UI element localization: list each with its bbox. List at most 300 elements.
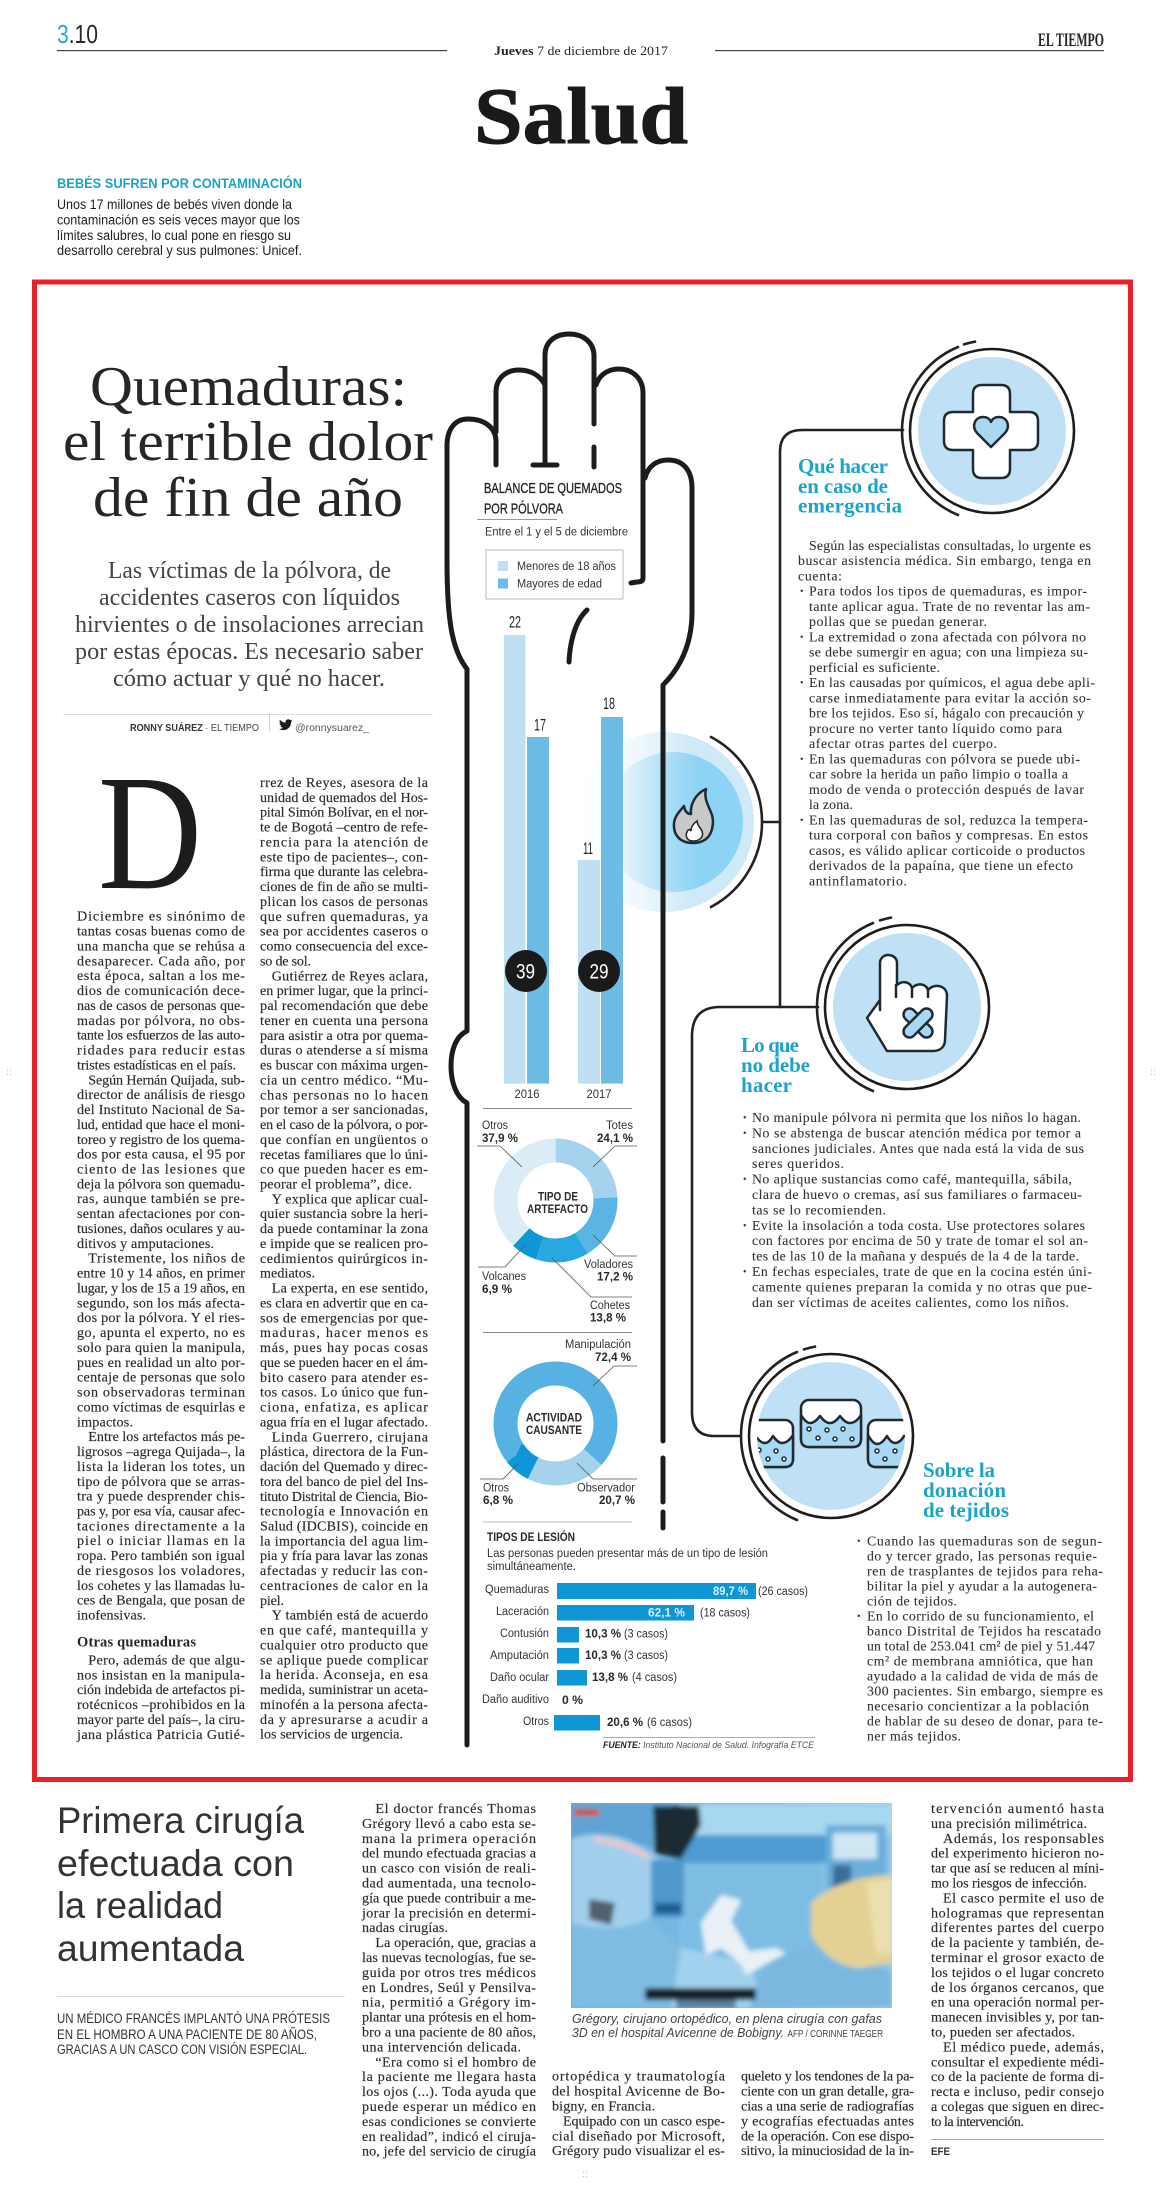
article column 2: rencia para la atención de bbox=[260, 834, 428, 850]
row: laceración: Laceración bbox=[496, 1606, 549, 1618]
chart: tipos de lesión bbox=[482, 1529, 808, 1730]
list: derivados de la papaína, que tiene un efecto bbox=[809, 858, 1073, 873]
article 2 column 1: una intervención delicada. bbox=[362, 2039, 521, 2055]
list: Cuando las quemaduras son de segun- bbox=[867, 1534, 1102, 1548]
article 2 column 1: bro a una paciente de 80 años, bbox=[362, 2024, 536, 2040]
connector lines bbox=[692, 430, 903, 1436]
list: antinflamatorio. bbox=[809, 874, 907, 888]
icon: hand with bandage bbox=[817, 918, 989, 1091]
article column 1: ropa. Pero también son igual bbox=[77, 1548, 245, 1564]
donut: actividad causante: CAUSANTE bbox=[526, 1423, 582, 1437]
chart: balance de quemados: Entre el 1 y el 5 de diciembre bbox=[485, 526, 628, 538]
article 2 column 4 bbox=[931, 1801, 1105, 2130]
secondary headline bbox=[57, 1800, 304, 1969]
secondary headline: la realidad bbox=[57, 1885, 223, 1926]
article column 2: minofén a la persona afecta- bbox=[260, 1697, 428, 1713]
donut: actividad causante: Observador bbox=[577, 1483, 635, 1495]
list bbox=[857, 1534, 1103, 1744]
chart: tipos de lesión: simultáneamente. bbox=[487, 1561, 576, 1573]
list: • bbox=[857, 1536, 861, 1548]
article column 2: rrez de Reyes, asesora de la bbox=[260, 775, 429, 791]
page number: 3.10 bbox=[57, 19, 98, 49]
headline bbox=[63, 356, 433, 529]
article 2 column 4: en una operación normal per- bbox=[931, 1995, 1104, 2011]
list: No se abstenga de buscar atención médica por temor a bbox=[752, 1125, 1081, 1140]
article column 2: chas personas no lo hacen bbox=[260, 1087, 428, 1103]
list: banco Distrital de Tejidos ha rescatado bbox=[867, 1624, 1101, 1638]
heading: donación bbox=[923, 1478, 1006, 1502]
article 2 column 1: en Londres, Seúl y Pensilva- bbox=[362, 1980, 536, 1996]
article column 2: Linda Guerrero, cirujana bbox=[272, 1429, 429, 1445]
list bbox=[798, 538, 1095, 888]
article 2 column 1: puede esperar un médico en bbox=[362, 2099, 536, 2115]
bars 2017 bbox=[578, 694, 623, 1084]
heading bbox=[923, 1458, 1009, 1522]
list: camente quienes preparan la comida y no otras que pue- bbox=[752, 1279, 1092, 1294]
chart title: BALANCE DE QUEMADOS bbox=[484, 480, 622, 497]
icon: twitter bird bbox=[279, 719, 292, 730]
row: quemaduras bbox=[485, 1583, 808, 1599]
row: daño auditivo: 0 % bbox=[562, 1693, 583, 1707]
article column 1: lud, entidad que hace el moni- bbox=[77, 1117, 245, 1133]
secondary deck: GRACIAS A UN CASCO CON VISIÓN ESPECIAL. bbox=[57, 2042, 307, 2057]
article 2 column 4: diferentes partes del cuerpo bbox=[931, 1920, 1104, 1936]
article column 1: inofensivas. bbox=[77, 1608, 146, 1624]
list: car sobre la herida un paño limpio o toalla a bbox=[809, 767, 1068, 782]
article 2 column 1: Grégory llevó a cabo esta se- bbox=[362, 1816, 536, 1832]
row: otros: (6 casos) bbox=[647, 1717, 692, 1729]
article column 1: pues en realidad un alto por- bbox=[77, 1355, 245, 1371]
list: la zona. bbox=[809, 797, 853, 812]
article 2 column 2: cial diseñado por Microsoft, bbox=[552, 2128, 725, 2144]
heading bbox=[798, 454, 902, 518]
article column 1: segundo, son los más afecta- bbox=[77, 1295, 245, 1311]
article column 1: ras, aunque también se pre- bbox=[77, 1191, 245, 1207]
article column 2: por temor a ser sancionadas, bbox=[260, 1102, 428, 1118]
article 2 column 1: los ojos (...). Toda ayuda que bbox=[362, 2084, 536, 2100]
article 2 column 4: del experimento hicieron no- bbox=[931, 1846, 1104, 1862]
row: contusión: Contusión bbox=[500, 1628, 549, 1640]
row: amputación: Amputación bbox=[490, 1650, 549, 1662]
list: La extremidad o zona afectada con pólvora no bbox=[809, 630, 1086, 644]
donut: tipo de artefacto: 24,1 % bbox=[597, 1131, 633, 1145]
donut: tipo de artefacto: 37,9 % bbox=[482, 1131, 518, 1145]
article column 1 bbox=[76, 909, 246, 1743]
article column 2: dación del Quemado y direc- bbox=[260, 1459, 428, 1475]
article column 1: ces de Bengala, que posan de bbox=[77, 1593, 245, 1609]
article 2 column 4: El casco permite el uso de bbox=[943, 1890, 1104, 1906]
list: bilitar la piel y ayudar a la autogenera- bbox=[867, 1578, 1097, 1594]
article column 2: maduras, hacer menos es bbox=[260, 1325, 428, 1341]
article column 2: Salud (IDCBIS), coincide en bbox=[260, 1518, 428, 1534]
page header bbox=[57, 19, 1104, 58]
row: laceración bbox=[496, 1605, 750, 1620]
list: • bbox=[743, 1175, 747, 1186]
list: buscar asistencia médica. Sin embargo, tenga en bbox=[798, 553, 1091, 568]
donut: tipo de artefacto: 13,8 % bbox=[590, 1311, 626, 1325]
article 2 column 4: terminar el grosor exacto de bbox=[931, 1950, 1104, 1966]
article 2 column 4: mo los riesgos de infección. bbox=[931, 1876, 1087, 1892]
list: de hablar de su deseo de donar, para te- bbox=[867, 1714, 1103, 1728]
article column 1: dos por esta causa, el 95 por bbox=[77, 1147, 245, 1163]
heading: Qué hacer bbox=[798, 454, 888, 478]
heading: hacer bbox=[741, 1073, 792, 1097]
article column 1: jana plástica Patricia Gutié- bbox=[76, 1727, 245, 1743]
heading bbox=[741, 1033, 810, 1097]
list: tante aplicar agua. Trate de no reventar las am- bbox=[809, 599, 1090, 614]
article 2 column 4: una precisión milimétrica. bbox=[931, 1816, 1087, 1832]
article 2 column 4: recta e incluso, pedir consejo bbox=[931, 2084, 1104, 2100]
article column 1: director de análisis de riesgo bbox=[77, 1087, 245, 1103]
chart: balance de quemados bbox=[477, 480, 628, 1101]
article column 2: se aplique puede complicar bbox=[260, 1652, 428, 1668]
article 2 column 1: mana la primera operación bbox=[362, 1831, 536, 1847]
heading: no debe bbox=[741, 1053, 810, 1077]
total 39: 39 bbox=[516, 960, 535, 984]
article column 2: ciona, enfatiza, es aplicar bbox=[260, 1400, 428, 1416]
article column 2: cualquier otro producto que bbox=[260, 1638, 428, 1654]
article column 2: da y apresurarse a acudir a bbox=[260, 1712, 429, 1728]
article column 1: piel o iniciar llamas en la bbox=[77, 1533, 246, 1549]
list: casos, es válido aplicar corticoide o productos bbox=[809, 843, 1085, 858]
article column 1: toreo y registro de los quema- bbox=[77, 1132, 245, 1148]
headline: Quemaduras: bbox=[90, 356, 407, 418]
subheading: Otras quemaduras bbox=[77, 1635, 196, 1651]
list: con factores por encima de 50 y trate de tomar el sol an- bbox=[752, 1233, 1088, 1248]
article 2 column 4: El médico puede, además, bbox=[943, 2039, 1104, 2055]
row: contusión: (3 casos) bbox=[624, 1628, 668, 1640]
list: Evite la insolación a toda costa. Use protectores solares bbox=[752, 1218, 1085, 1233]
red frame bbox=[34, 282, 1130, 1780]
article column 2: plican los casos de personas bbox=[260, 894, 428, 910]
article 2 column 4: to la intervención. bbox=[931, 2114, 1024, 2130]
standfirst: cómo actuar y qué no hacer. bbox=[113, 666, 385, 692]
article column 1: impactos. bbox=[77, 1414, 133, 1430]
article column 2: quier sustancia sobre la heri- bbox=[260, 1206, 428, 1222]
donut: tipo de artefacto: ARTEFACTO bbox=[527, 1202, 588, 1216]
article 2 column 4: de la paciente y también, de- bbox=[931, 1935, 1104, 1951]
list: En las quemaduras con pólvora se puede ubi- bbox=[809, 752, 1080, 766]
article column 1: lista la lideran los totes, un bbox=[77, 1459, 245, 1475]
row: contusión bbox=[500, 1626, 668, 1642]
article column 1: tantas cosas buenas como de bbox=[77, 924, 245, 940]
row: quemaduras: Quemaduras bbox=[485, 1584, 549, 1596]
heading: en caso de bbox=[798, 474, 888, 498]
heading: Sobre la bbox=[923, 1458, 996, 1482]
credit: EFE bbox=[931, 2146, 950, 2158]
article 2 column 1: no, jefe del servicio de cirugía bbox=[362, 2144, 537, 2160]
secondary headline: efectuada con bbox=[57, 1843, 294, 1884]
list: En las quemaduras de sol, reduzca la tempera- bbox=[809, 812, 1088, 828]
article column 2: da puede contaminar la zona bbox=[260, 1221, 429, 1237]
article column 1: tra y puede desprender chis- bbox=[77, 1489, 245, 1505]
row: amputación: (3 casos) bbox=[624, 1650, 668, 1662]
donut: actividad causante: Manipulación bbox=[565, 1339, 631, 1351]
brief: bebés: BEBÉS SUFREN POR CONTAMINACIÓN bbox=[57, 176, 302, 191]
article 2 column 4: to, pueden ser afectados. bbox=[931, 2024, 1075, 2040]
list: • bbox=[800, 587, 804, 598]
article 2 column 3: sitivo, la minuciosidad de la in- bbox=[741, 2143, 914, 2159]
article 2 column 4: hologramas que representan bbox=[931, 1905, 1104, 1921]
article 2 column 4: Además, los responsables bbox=[943, 1831, 1104, 1847]
article column 2: Y explica que aplicar cual- bbox=[272, 1191, 428, 1207]
article 2 column 4: manecen invisibles y, por tan- bbox=[931, 2010, 1104, 2026]
bars 2017: 11 bbox=[583, 839, 593, 858]
article column 2: recetas familiares que lo úni- bbox=[260, 1147, 428, 1163]
article column 1: rotécnicos –prohibidos en la bbox=[77, 1697, 246, 1713]
article 2 column 1: “Era como si el hombro de bbox=[375, 2054, 536, 2070]
article 2 column 4: a colegas que siguen en direc- bbox=[931, 2099, 1104, 2115]
article column 1: entre 10 y 14 años, en primer bbox=[77, 1266, 245, 1282]
article 2 column 4: los tejidos o el lugar concreto bbox=[931, 1965, 1104, 1981]
row: daño ocular: Daño ocular bbox=[490, 1672, 549, 1684]
standfirst: Las víctimas de la pólvora, de bbox=[108, 558, 391, 584]
article 2 column 1: las nuevas tecnologías, fue se- bbox=[362, 1950, 536, 1966]
brief: bebés bbox=[57, 176, 302, 258]
panel: qué hacer en caso de emergencia bbox=[798, 342, 1095, 889]
article column 2: co que pueden hacer es em- bbox=[260, 1162, 428, 1178]
chart: balance de quemados: 2016 bbox=[514, 1089, 540, 1101]
article 2 column 4: consultar el expediente médi- bbox=[931, 2054, 1104, 2070]
donut: tipo de artefacto: Cohetes bbox=[590, 1300, 630, 1312]
article column 1: sentan afectaciones por con- bbox=[77, 1206, 245, 1222]
article column 2: tora del banco de piel del Ins- bbox=[260, 1474, 428, 1490]
article column 2: afectadas y reducir las con- bbox=[260, 1563, 428, 1579]
list: 300 pacientes. Sin embargo, siempre es bbox=[867, 1684, 1103, 1698]
photo caption bbox=[572, 2012, 883, 2040]
standfirst: hirvientes o de insolaciones arrecian bbox=[75, 612, 424, 638]
list: • bbox=[800, 632, 804, 644]
donut: actividad causante: 20,7 % bbox=[599, 1493, 635, 1507]
list: ner más tejidos. bbox=[867, 1728, 961, 1744]
article column 1: Entre los artefactos más pe- bbox=[88, 1429, 245, 1445]
donut: tipo de artefacto: TIPO DE bbox=[538, 1190, 578, 1204]
list: No aplique sustancias como café, mantequilla, sábila, bbox=[752, 1172, 1072, 1187]
article column 2: centraciones de calor en la bbox=[260, 1578, 429, 1594]
photo caption: Grégory, cirujano ortopédico, en plena cirugía con gafas bbox=[572, 2012, 882, 2026]
row: amputación bbox=[490, 1648, 668, 1664]
article 2 column 4: tervención aumentó hasta bbox=[931, 1801, 1105, 1817]
list: do y tercer grado, las personas requie- bbox=[867, 1548, 1097, 1564]
article column 2: mediatos. bbox=[260, 1266, 315, 1282]
article column 2: pal recomendación que debe bbox=[260, 998, 428, 1014]
article column 1: esta época, saltan a los me- bbox=[77, 968, 245, 984]
article column 1: Pero, además de que algu- bbox=[88, 1652, 245, 1668]
article column 2: Y también está de acuerdo bbox=[272, 1608, 428, 1624]
photo caption: AFP / CORINNE TAEGER bbox=[788, 2029, 883, 2040]
standfirst bbox=[75, 558, 424, 692]
glow behind arm bbox=[574, 732, 754, 912]
article 2 column 1: en realidad”, indicó el ciruja- bbox=[362, 2129, 536, 2145]
article column 2: agua fría en el lugar afectado. bbox=[260, 1414, 428, 1430]
list: • bbox=[800, 754, 804, 766]
heading: de tejidos bbox=[923, 1498, 1009, 1522]
headline: de fin de año bbox=[93, 467, 403, 529]
list: En fechas especiales, trate de que en la cocina estén úni- bbox=[752, 1264, 1092, 1279]
list: En las causadas por químicos, el agua debe apli- bbox=[809, 675, 1095, 690]
row: otros: Otros bbox=[523, 1716, 549, 1728]
article 2 column 1: un casco con visión de reali- bbox=[362, 1861, 536, 1877]
hand and arm outline bbox=[447, 334, 692, 1745]
row: laceración: (18 casos) bbox=[700, 1608, 750, 1620]
article column 2 bbox=[260, 775, 429, 1743]
row: daño ocular bbox=[490, 1670, 677, 1686]
article 2 column 1: nadas cirugías. bbox=[362, 1920, 448, 1936]
article column 2: tituto Distrital de Ciencia, Bio- bbox=[260, 1489, 428, 1505]
donut: tipo de artefacto: Totes bbox=[606, 1120, 633, 1132]
article column 2: sea por accidentes caseros o bbox=[260, 924, 428, 940]
article column 1: solo para quien la manipula, bbox=[77, 1340, 245, 1356]
article column 1: nos insistan en la manipula- bbox=[77, 1667, 245, 1683]
article 2 column 3 bbox=[741, 2069, 914, 2159]
list: Para todos los tipos de quemaduras, es impor- bbox=[809, 584, 1087, 599]
article column 1: son observadoras terminan bbox=[77, 1384, 245, 1400]
list: dan ser víctimas de aceites calientes, como los niños. bbox=[752, 1295, 1069, 1310]
list: perficial es suficiente. bbox=[809, 660, 940, 675]
article 2 column 3: ciente con un gran detalle, gra- bbox=[741, 2084, 914, 2100]
donut: tipo de artefacto: 17,2 % bbox=[597, 1270, 633, 1284]
article column 2: la importancia del agua lim- bbox=[260, 1533, 428, 1549]
secondary deck bbox=[57, 2011, 330, 2057]
panel: sobre la donación de tejidos bbox=[740, 1347, 1103, 1744]
article 2 column 1 bbox=[361, 1801, 537, 2160]
article column 2: en el caso de la pólvora, o por- bbox=[260, 1117, 428, 1133]
article column 2: como consecuencia del exce- bbox=[260, 939, 428, 955]
article column 2: cedimientos quirúrgicos in- bbox=[260, 1251, 428, 1267]
article 2 column 4: co de la paciente de forma di- bbox=[931, 2069, 1104, 2085]
article column 2: plástica, directora de la Fun- bbox=[260, 1444, 428, 1460]
list: cuenta: bbox=[798, 568, 842, 584]
brief: bebés: contaminación es seis veces mayor que los bbox=[57, 212, 300, 228]
newspaper name: EL TIEMPO bbox=[1038, 31, 1104, 51]
heading: Lo que bbox=[741, 1033, 799, 1057]
row: otros: 20,6 % bbox=[607, 1715, 643, 1729]
article column 1: centaje de personas que solo bbox=[77, 1370, 245, 1386]
donut: tipo de artefacto bbox=[477, 1120, 637, 1325]
article column 2: La experta, en ese sentido, bbox=[272, 1281, 428, 1297]
article column 1: mayor parte del país–, la ciru- bbox=[77, 1712, 245, 1728]
date: Jueves 7 de diciembre de 2017 bbox=[494, 43, 669, 58]
donut: actividad causante: 6,8 % bbox=[483, 1493, 513, 1507]
list: cm² de membrana amniótica, que han bbox=[867, 1654, 1093, 1668]
list: sanciones judiciales. Antes que nada está la vida de sus bbox=[752, 1141, 1084, 1156]
legend: Mayores de edad bbox=[517, 579, 602, 591]
article column 1: madas por pólvora, no obs- bbox=[77, 1013, 245, 1029]
list bbox=[743, 1110, 1092, 1310]
donut: tipo de artefacto: Volcanes bbox=[482, 1271, 526, 1283]
article column 2: tecnología e Innovación en bbox=[260, 1504, 428, 1520]
list: pollas que se puedan generar. bbox=[809, 614, 987, 629]
list: un total de 253.041 cm² de piel y 51.447 bbox=[867, 1638, 1095, 1654]
article column 1: una mancha que se rehúsa a bbox=[77, 938, 246, 954]
article column 1: desaparecer. Cada año, por bbox=[77, 953, 245, 969]
article column 2: la herida. Aconseja, en esa bbox=[260, 1667, 429, 1683]
brief: bebés: límites salubres, lo cual pone en riesgo su bbox=[57, 228, 291, 243]
article 2 column 3: cias a una serie de radiografías bbox=[741, 2098, 914, 2114]
article column 1: Según Hernán Quijada, sub- bbox=[88, 1072, 245, 1088]
list: ren de trasplantes de tejidos para reha- bbox=[867, 1564, 1103, 1578]
list: ayudado a la calidad de vida de más de bbox=[867, 1668, 1098, 1684]
article column 2: piel. bbox=[260, 1593, 284, 1609]
article column 2: sos de emergencias por que- bbox=[260, 1310, 428, 1326]
article column 2: firma que durante las celebra- bbox=[260, 864, 428, 880]
article column 1: ditivos y amputaciones. bbox=[77, 1236, 214, 1252]
article column 1: dos por la pólvora. Y el ries- bbox=[77, 1310, 245, 1326]
article column 2: en primer lugar, que la princi- bbox=[260, 983, 428, 999]
secondary headline: Primera cirugía bbox=[57, 1800, 304, 1841]
article column 1: tante los esfuerzos de las auto- bbox=[77, 1028, 245, 1044]
article column 1: ridades para reducir estas bbox=[77, 1042, 245, 1058]
list: • bbox=[800, 816, 804, 826]
chart: balance de quemados: 2017 bbox=[586, 1089, 612, 1101]
list: Según las especialistas consultadas, lo urgente es bbox=[809, 538, 1091, 553]
chart: balance de quemados: POR PÓLVORA bbox=[484, 500, 563, 518]
article column 2: ciones de fin de año se multi- bbox=[260, 879, 428, 895]
byline: @ronnysuarez_ bbox=[295, 722, 369, 734]
list: tura corporal con baños y compresas. En estos bbox=[809, 828, 1088, 843]
donut: actividad causante: 72,4 % bbox=[595, 1350, 631, 1364]
drop cap: D bbox=[98, 741, 202, 924]
article 2 column 1: La operación, que, gracias a bbox=[375, 1935, 537, 1951]
article column 2: pia y fría para lavar las zonas bbox=[260, 1548, 428, 1564]
article column 1: de riesgosos los voladores, bbox=[77, 1563, 245, 1579]
list: bre los tejidos. Eso sí, hágalo con precaución y bbox=[809, 706, 1084, 721]
source: FUENTE: Instituto Nacional de Salud. Infografía ETCE bbox=[603, 1740, 815, 1751]
article column 2: Gutiérrez de Reyes aclara, bbox=[272, 968, 428, 984]
article column 2: bito casero para atender es- bbox=[260, 1370, 428, 1386]
article 2 column 3: de la operación. Con ese dispo- bbox=[741, 2128, 914, 2144]
article column 2: tener en cuenta una persona bbox=[260, 1013, 429, 1029]
list: No manipule pólvora ni permita que los niños lo hagan. bbox=[752, 1110, 1081, 1125]
article 2 column 1: El doctor francés Thomas bbox=[375, 1801, 536, 1817]
photo caption: 3D en el hospital Avicenne de Bobigny. bbox=[572, 2026, 784, 2040]
article column 1: Diciembre es sinónimo de bbox=[77, 909, 245, 925]
secondary deck: EN EL HOMBRO A UNA PACIENTE DE 80 AÑOS, bbox=[57, 2027, 317, 2042]
bars 2016: 17 bbox=[534, 716, 546, 734]
article column 1: dios de comunicación dece- bbox=[77, 983, 245, 999]
article 2 column 1: jorar la precisión en determi- bbox=[361, 1905, 536, 1921]
section title: Salud bbox=[474, 73, 688, 161]
article 2 column 1: la paciente me llegara hasta bbox=[362, 2069, 537, 2085]
article column 2: es clara en advertir que en ca- bbox=[260, 1296, 428, 1312]
article column 2: pital Simón Bolívar, en el nor- bbox=[260, 805, 428, 821]
article column 1: ción indebida de artefactos pi- bbox=[77, 1682, 245, 1698]
article 2 column 1: nia, permitió a Grégory im- bbox=[362, 1995, 536, 2011]
panel: lo que no debe hacer bbox=[741, 918, 1092, 1310]
article column 2: tos casos. Lo único que fun- bbox=[260, 1385, 428, 1401]
list: tas se lo recomienden. bbox=[752, 1202, 886, 1217]
donut: actividad causante: Otros bbox=[483, 1483, 509, 1495]
article 2 column 1: plantar una prótesis en el hom- bbox=[362, 2010, 536, 2026]
article column 1: como víctimas de esquirlas e bbox=[77, 1399, 245, 1415]
donut: actividad causante bbox=[480, 1339, 637, 1507]
total 39 bbox=[505, 950, 547, 992]
article column 1: Tristemente, los niños de bbox=[88, 1251, 245, 1267]
article 2 column 2: Grégory pudo visualizar el es- bbox=[552, 2143, 725, 2159]
secondary deck: UN MÉDICO FRANCÉS IMPLANTÓ UNA PRÓTESIS bbox=[57, 2011, 330, 2026]
list: carse inmediatamente para evitar la acción so- bbox=[809, 690, 1091, 706]
article 2 column 2: del hospital Avicenne de Bo- bbox=[552, 2084, 725, 2100]
row: daño auditivo bbox=[482, 1693, 583, 1707]
article column 1: del Instituto Nacional de Sa- bbox=[77, 1102, 245, 1118]
list: afectar otras partes del cuerpo. bbox=[809, 736, 997, 751]
article 2 column 1: dad aumentada, una tecnolo- bbox=[362, 1876, 536, 1892]
article column 1: los cohetes y las llamadas lu- bbox=[77, 1578, 245, 1594]
article 2 column 1: gía que puede contribuir a me- bbox=[362, 1890, 536, 1906]
article column 1: tusiones, daños oculares y au- bbox=[77, 1221, 245, 1237]
list: tes de las 10 de la mañana y después de la 4 de la tarde. bbox=[752, 1249, 1079, 1264]
secondary headline: aumentada bbox=[57, 1928, 244, 1969]
